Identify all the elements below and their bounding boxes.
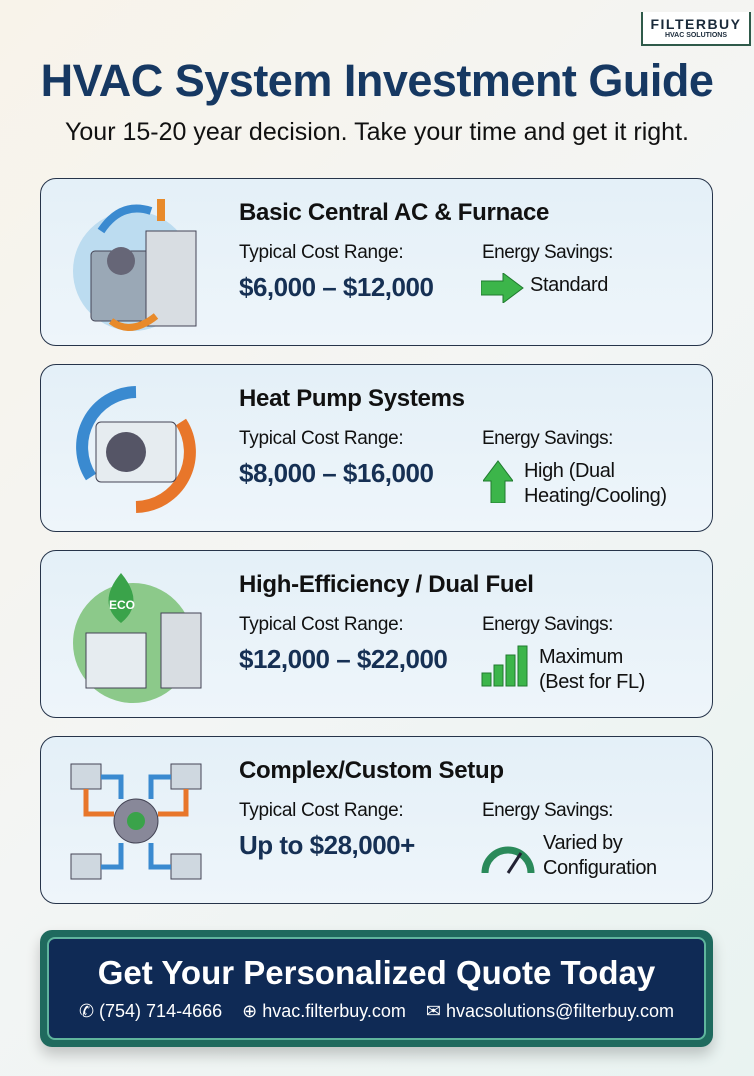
icon: up arrow <box>483 460 513 503</box>
logo: FILTERBUY <box>650 16 742 32</box>
logo: HVAC SOLUTIONS <box>665 32 727 39</box>
icon: eco dual fuel: ECO <box>109 598 135 612</box>
energy savings: Energy Savings: <box>482 614 613 635</box>
cost: Typical Cost Range: <box>239 614 403 635</box>
panel: high efficiency: (Best for FL) <box>539 671 645 693</box>
subtitle: Your 15-20 year decision. Take your time and get it right. <box>65 118 689 146</box>
energy savings: Energy Savings: <box>482 800 613 821</box>
icon: custom network <box>70 764 202 880</box>
cost: Typical Cost Range: <box>239 428 403 449</box>
panel: heat pump: High (Dual <box>524 460 614 482</box>
icon: right arrow <box>481 273 524 303</box>
icon: gauge <box>482 846 534 874</box>
heading: Heat Pump Systems <box>239 385 465 412</box>
panel: complex custom: Up to $28,000+ <box>239 830 415 860</box>
panel: high efficiency: Maximum <box>539 646 623 668</box>
energy savings: Energy Savings: <box>482 242 613 263</box>
icon: eco dual fuel <box>73 573 202 703</box>
panel: high efficiency: $12,000 – $22,000 <box>239 644 447 674</box>
cost: Typical Cost Range: <box>239 242 403 263</box>
icon: bars <box>482 646 528 686</box>
title: HVAC System Investment Guide <box>41 55 713 106</box>
heading: Basic Central AC & Furnace <box>239 199 549 226</box>
panel: complex custom: Varied by <box>543 832 622 854</box>
panel: basic central AC: $6,000 – $12,000 <box>239 272 433 302</box>
panel: basic central AC: Standard <box>530 274 608 296</box>
panel: complex custom: Configuration <box>543 857 657 879</box>
cost: Typical Cost Range: <box>239 800 403 821</box>
CTA banner <box>40 930 713 1047</box>
CTA heading: Get Your Personalized Quote Today <box>98 954 655 991</box>
panel: complex custom <box>40 736 713 904</box>
heading: High-Efficiency / Dual Fuel <box>239 571 534 598</box>
contact line: ✆ (754) 714-4666 ⊕ hvac.filterbuy.com ✉ hvacsolutions@filterbuy.com <box>79 1001 674 1021</box>
icon: heat pump <box>76 386 196 513</box>
panel: basic central AC <box>40 178 713 346</box>
logo <box>641 12 751 46</box>
heading: Complex/Custom Setup <box>239 757 504 784</box>
icon: AC and furnace <box>73 199 196 331</box>
panel: heat pump: $8,000 – $16,000 <box>239 458 433 488</box>
panel: heat pump <box>40 364 713 532</box>
panel: high efficiency <box>40 550 713 718</box>
panel: heat pump: Heating/Cooling) <box>524 485 667 507</box>
energy savings: Energy Savings: <box>482 428 613 449</box>
